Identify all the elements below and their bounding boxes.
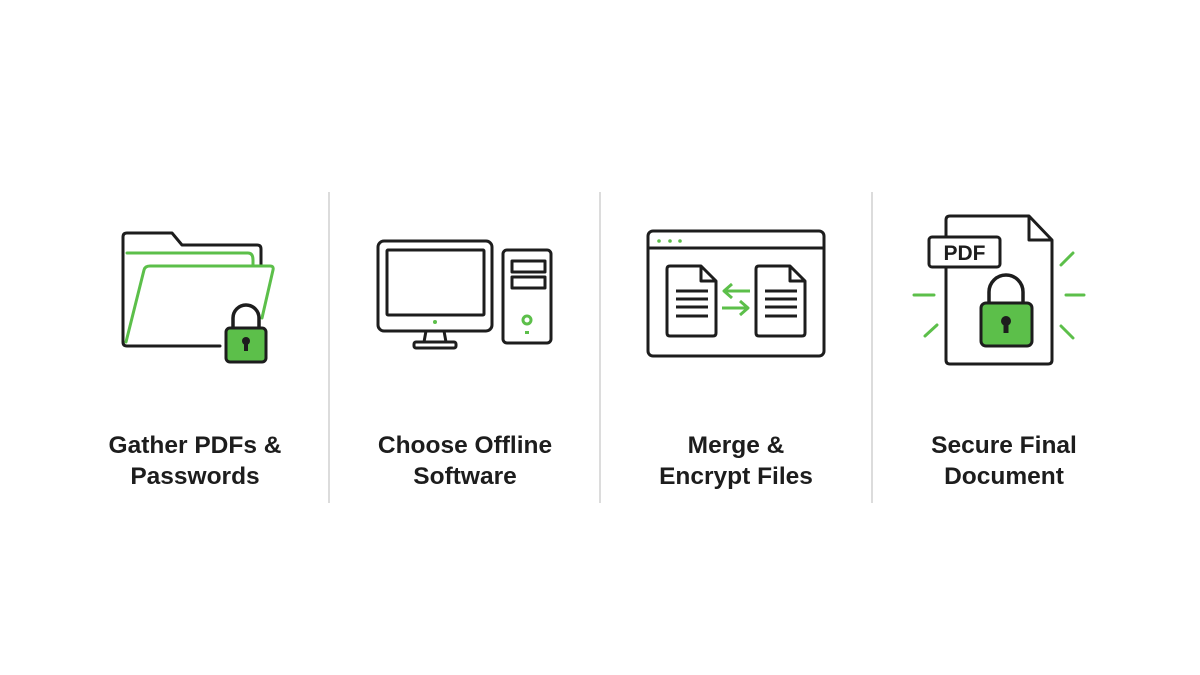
- label: gather: Gather PDFs &: [109, 432, 281, 459]
- step 3: merge & encrypt: [648, 231, 824, 490]
- step 1: gather pdfs: [109, 233, 281, 490]
- step 4: secure document: Document: [944, 463, 1064, 490]
- step 2: offline software: Software: [413, 463, 517, 490]
- label: secure: Secure Final: [931, 432, 1077, 459]
- icon: pdf lock: [914, 216, 1084, 364]
- label: offline: Choose Offline: [378, 432, 552, 459]
- label: merge: Merge &: [688, 432, 784, 459]
- step 4: secure document: PDF: [944, 242, 986, 265]
- icon: folder with lock: [123, 233, 273, 362]
- step 3: merge & encrypt: Encrypt Files: [659, 463, 813, 490]
- step 2: offline software: [378, 241, 552, 490]
- step 4: secure document: [914, 216, 1084, 490]
- icon: computer: [378, 241, 551, 348]
- step 1: gather pdfs: Passwords: [130, 463, 260, 490]
- icon: browser with docs: [648, 231, 824, 356]
